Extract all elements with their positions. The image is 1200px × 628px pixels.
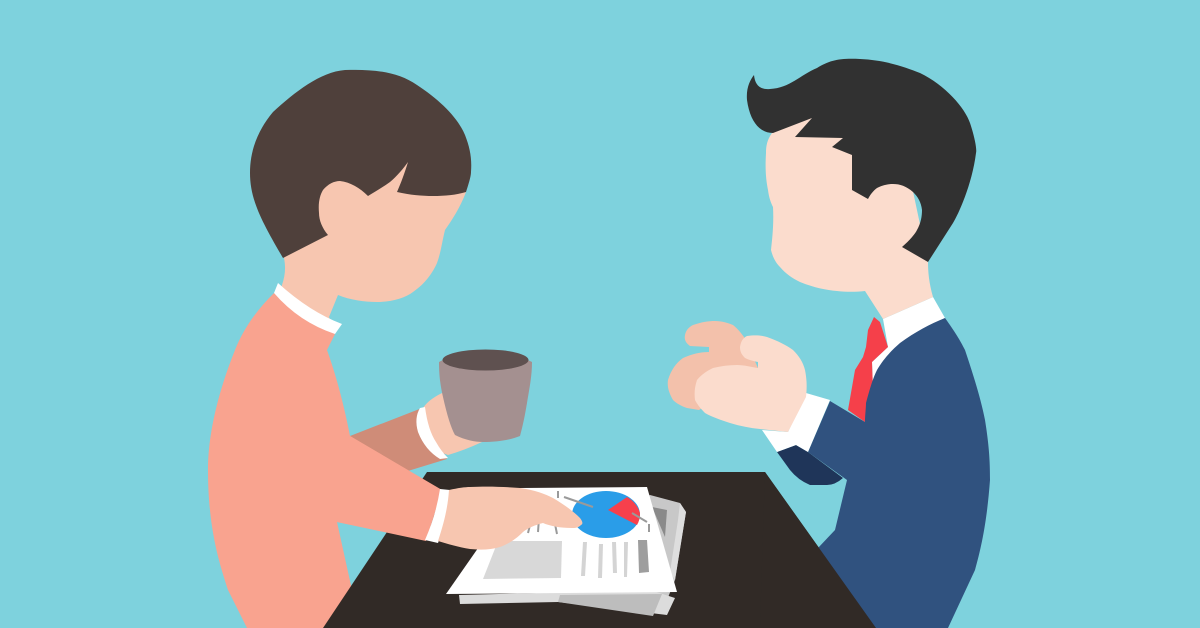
pointing cuff [425,489,450,543]
far cuff [416,407,448,459]
back hand [668,321,758,410]
head and neck [278,140,466,330]
sweater body and near arm [208,293,440,628]
top sheet [446,487,677,594]
chart leader lines [528,491,649,534]
tie [848,317,888,422]
hair [747,59,976,262]
shirt [872,297,945,390]
neck and head [766,110,933,319]
report grey block [483,541,562,579]
table front edge over jacket [760,472,876,628]
front hand [695,335,807,432]
back sheet dark panel [652,507,667,537]
pointing sleeve [337,436,442,541]
back sheet [640,495,686,600]
sweater collar [274,283,342,334]
left person's pointing arm [337,436,582,550]
table [323,472,876,628]
left person [208,70,532,628]
hair [250,70,471,258]
pie chart [572,491,640,538]
back sheet edge [670,503,686,580]
report dark box [638,540,649,573]
shirt sleeve underside [777,445,843,485]
lower sheet [459,590,675,615]
lower sheet shadow [558,594,662,616]
shirt cuff [762,393,830,452]
far forearm [350,408,447,478]
cup [439,350,532,442]
far hand [423,390,500,455]
report papers [446,487,686,616]
report bars [581,542,628,578]
jacket [808,318,990,628]
pointing hand [438,487,582,550]
right person [668,59,990,628]
